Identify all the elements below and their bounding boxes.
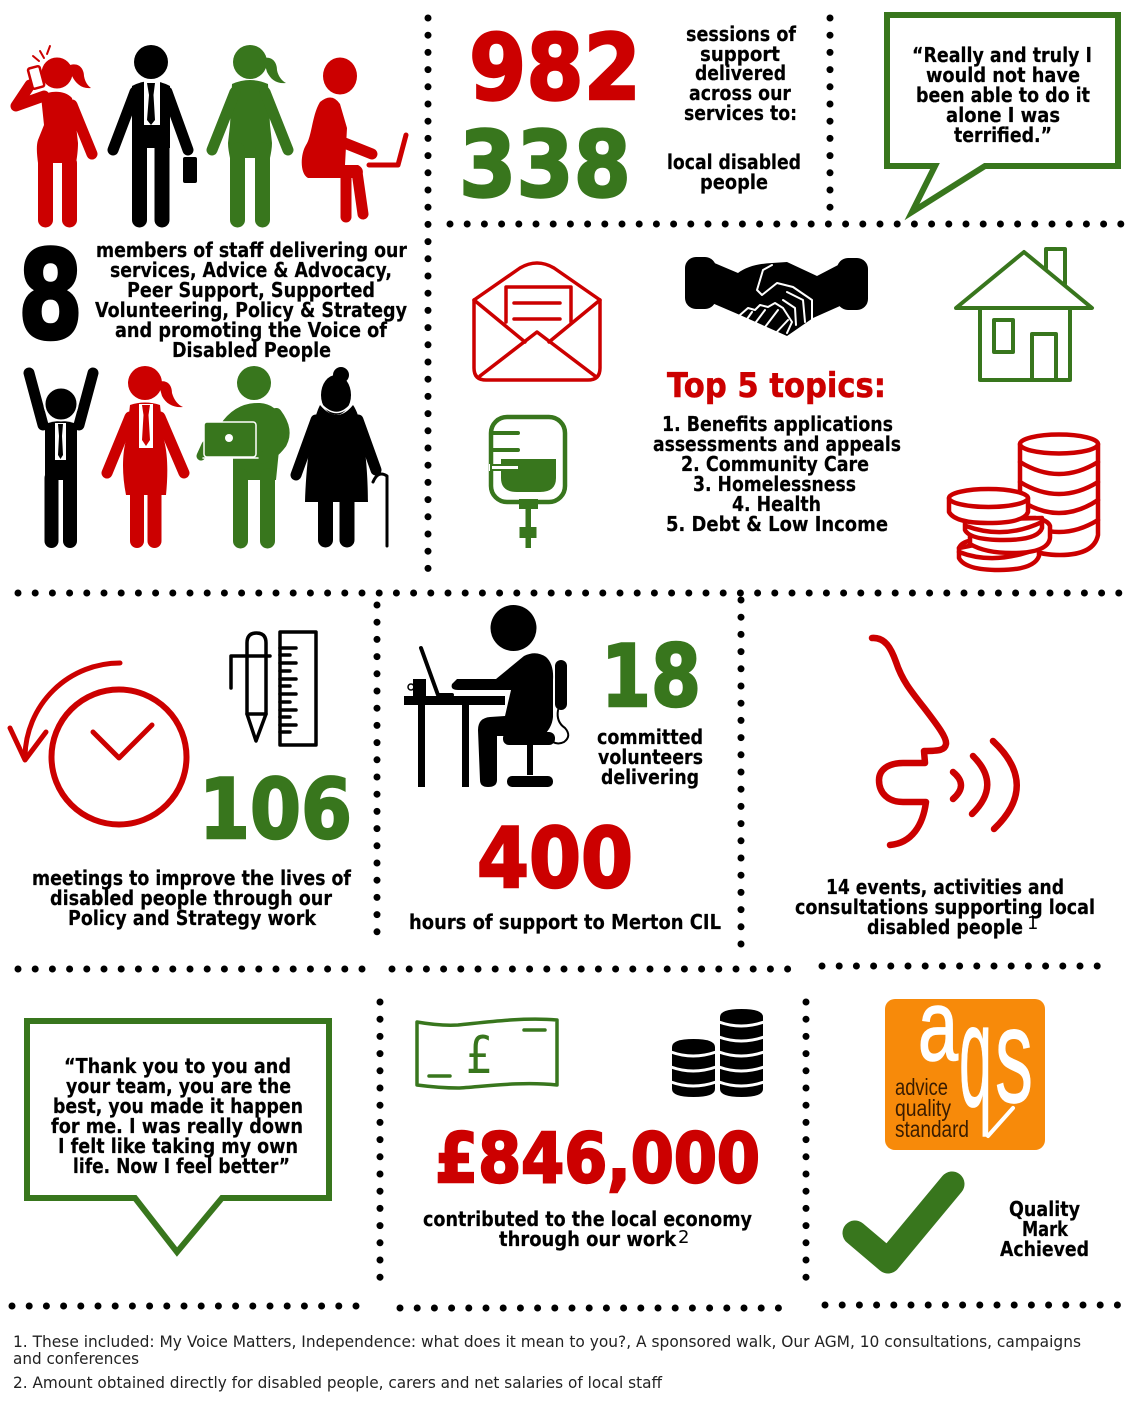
icon: man with briefcase (113, 45, 197, 220)
quality mark text: Achieved (1000, 1237, 1089, 1261)
events text: 14 events, activities and (826, 875, 1064, 899)
topics list: 2. Community Care (681, 452, 869, 476)
volunteers text: committed (597, 725, 703, 749)
people text: people (700, 170, 768, 194)
speech bubble: really and truly: would not have (926, 63, 1080, 87)
quality mark text (1000, 1197, 1089, 1261)
logo: advice quality standard: a (918, 970, 958, 1082)
events text: consultations supporting local (795, 895, 1095, 919)
icon: IV drip bag (489, 417, 565, 548)
icon: green check mark (855, 1184, 952, 1261)
logo: advice quality standard: standard (895, 1116, 969, 1142)
icon: banknote (417, 1019, 557, 1088)
topics list: 4. Health (732, 492, 821, 516)
quality mark text: Quality (1009, 1197, 1080, 1221)
speech bubble: really and truly: “Really and truly I (912, 43, 1092, 67)
people text (667, 150, 801, 194)
icon: speaking face (872, 638, 1017, 845)
icon: elderly woman with cane (296, 367, 387, 546)
economy text: through our work (499, 1227, 677, 1251)
events text: 1 (1027, 913, 1038, 934)
staff description text: and promoting the Voice of (115, 318, 387, 342)
speech bubble: thank you: your team, you are the (66, 1074, 291, 1098)
number 106: 106 (199, 761, 352, 858)
staff description text: Disabled People (172, 338, 331, 362)
economy text: contributed to the local economy (423, 1207, 752, 1231)
icon: seated woman with laptop (302, 58, 406, 217)
speech bubble: thank you: I felt like taking my own (58, 1134, 298, 1158)
quality mark text: Mark (1022, 1217, 1069, 1241)
sessions text: delivered (695, 61, 786, 85)
events text: disabled people (867, 915, 1023, 939)
icon: handshake (685, 257, 868, 336)
events text (795, 875, 1095, 939)
logo: advice quality standard: quality (895, 1095, 951, 1121)
staff description text: services, Advice & Advocacy, (110, 258, 392, 282)
number 982: 982 (469, 16, 641, 121)
sessions text: services to: (684, 101, 797, 125)
footnotes: and conferences (13, 1349, 139, 1368)
speech bubble: thank you: for me. I was really down (51, 1114, 303, 1138)
speech bubble: really and truly: terrified.” (954, 123, 1052, 147)
icon: green woman (212, 45, 288, 220)
speech bubble: really and truly: been able to do it (916, 83, 1090, 107)
icon: woman on phone (16, 46, 92, 220)
icon: banknote: £ (466, 1026, 493, 1086)
icon: clock with arrow (10, 663, 186, 824)
topics list: 3. Homelessness (693, 472, 856, 496)
people text: local disabled (667, 150, 801, 174)
icon: house (956, 249, 1092, 380)
staff description text: members of staff delivering our (96, 238, 407, 262)
speech bubble: thank you: “Thank you to you and (64, 1054, 291, 1078)
speech bubble: thank you (27, 1021, 329, 1252)
topics list: 1. Benefits applications (662, 412, 893, 436)
sessions text: support (700, 42, 780, 66)
speech bubble: thank you: best, you made it happen (53, 1094, 303, 1118)
icon: red coin stacks (949, 434, 1098, 570)
big number 8: 8 (18, 225, 83, 367)
number 18: 18 (601, 627, 701, 727)
economy text (423, 1207, 752, 1251)
logo: advice quality standard: advice (895, 1074, 948, 1100)
icon: man with arms raised (29, 373, 93, 541)
footnotes (13, 1332, 1081, 1392)
sessions text: sessions of (686, 22, 796, 46)
number 338: 338 (459, 113, 631, 218)
staff description text: Peer Support, Supported (127, 278, 375, 302)
number 400: 400 (477, 810, 633, 907)
volunteers text: volunteers (598, 745, 703, 769)
meetings text: meetings to improve the lives of (32, 866, 351, 890)
icon: envelope (474, 263, 600, 380)
hours text: hours of support to Merton CIL (409, 910, 721, 934)
meetings text: Policy and Strategy work (68, 906, 317, 930)
icon: person at desk with laptop (404, 605, 568, 787)
topics list: 5. Debt & Low Income (666, 512, 888, 536)
heading: top 5 topics: Top 5 topics: (667, 366, 886, 406)
speech bubble: really and truly (887, 15, 1118, 212)
volunteers text (597, 725, 703, 789)
topics list: assessments and appeals (653, 432, 901, 456)
volunteers text: delivering (601, 765, 699, 789)
icon: woman in red suit (107, 366, 184, 541)
sessions text (684, 22, 797, 125)
speech bubble: thank you: life. Now I feel better” (73, 1154, 290, 1178)
speech bubble: really and truly: alone I was (946, 103, 1060, 127)
icon: pen and ruler (231, 632, 316, 745)
staff description text (95, 238, 407, 362)
amount 846000: £846,000 (435, 1119, 760, 1199)
topics list (653, 412, 901, 536)
logo: advice quality standard: s (995, 980, 1033, 1131)
logo: advice quality standard: q (959, 974, 992, 1137)
economy text: 2 (678, 1227, 689, 1248)
footnotes: 1. These included: My Voice Matters, Independence: what does it mean to you?, A sponsored walk, Our AGM, 10 consultations, campaigns (13, 1332, 1081, 1351)
icon: black coin stacks (671, 1009, 764, 1097)
logo: advice quality standard (885, 970, 1045, 1150)
footnotes: 2. Amount obtained directly for disabled people, carers and net salaries of local staff (13, 1373, 663, 1392)
meetings text: disabled people through our (50, 886, 332, 910)
icon: man with laptop (201, 366, 284, 541)
staff description text: Volunteering, Policy & Strategy (95, 298, 407, 322)
sessions text: across our (689, 81, 791, 105)
meetings text (32, 866, 351, 930)
